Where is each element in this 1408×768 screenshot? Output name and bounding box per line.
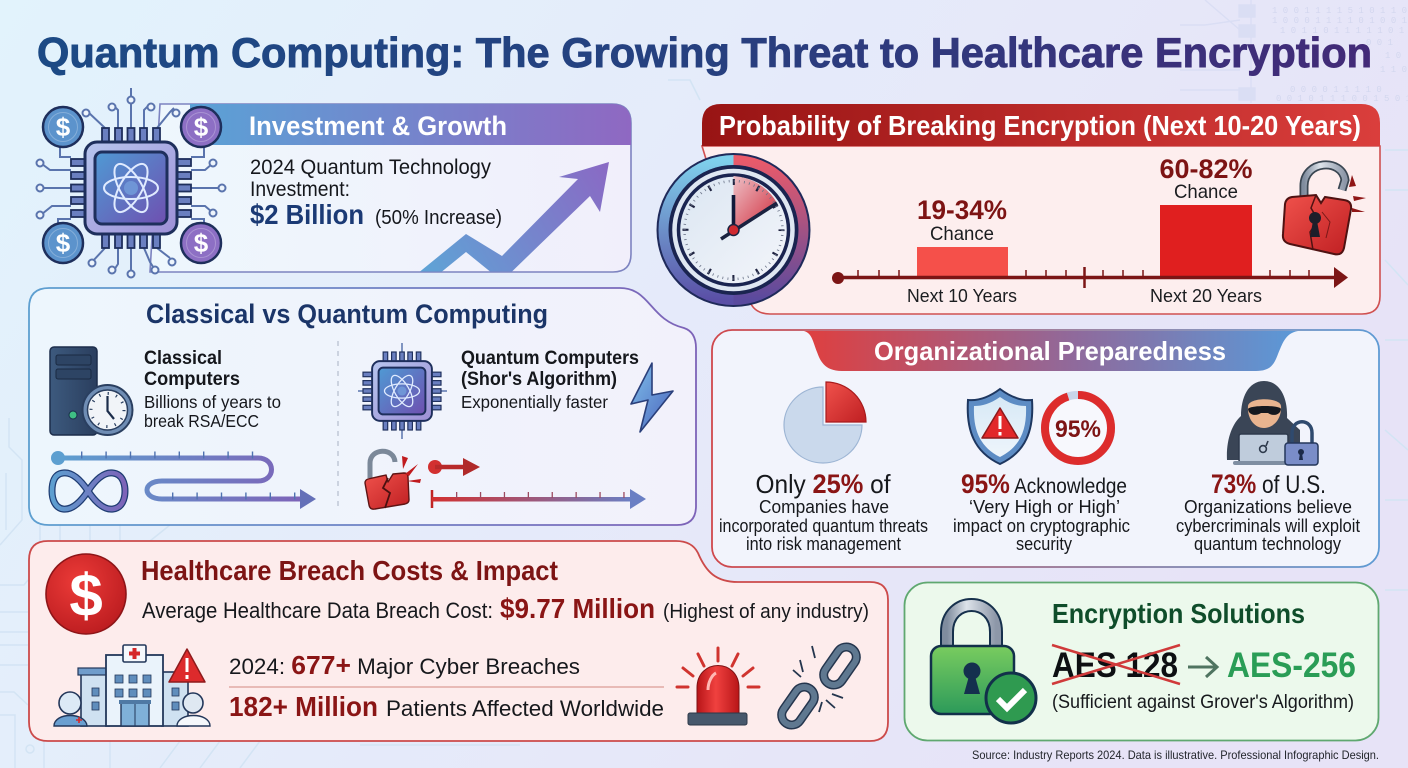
divider: [337, 341, 339, 510]
quantum text: (Shor's Algorithm): [461, 368, 617, 390]
icon: small quantum chip: [358, 343, 447, 439]
axis labels: Next 20 Years: [1150, 286, 1262, 306]
label: 60-82%: [1160, 154, 1252, 203]
label: 19-34%: 19-34%: [917, 195, 1007, 225]
investment text: [250, 155, 502, 230]
stat: 95% acknowledge: impact on cryptographic: [953, 515, 1130, 536]
icon: quantum chip with coins: $: [56, 228, 71, 258]
stat: 73% of U.S. organizations: 73% of U.S.: [1211, 469, 1326, 499]
icon: 95% ring: [1045, 395, 1111, 461]
panel header: Organizational Preparedness: [874, 336, 1226, 366]
background: 0 0 1: [1366, 38, 1393, 48]
breach statistics: Patients Affected Worldwide: [386, 696, 664, 721]
average cost line: Average Healthcare Data Breach Cost:: [142, 598, 493, 623]
timeline axis: [832, 267, 1348, 288]
source note: Source: Industry Reports 2024. Data is illustrative. Professional Infographic Design.: [972, 748, 1379, 762]
average cost line: $9.77 Million: [500, 593, 655, 624]
stat: 25% of companies: Only 25% of: [756, 469, 891, 499]
AES note: (Sufficient against Grover's Algorithm): [1052, 692, 1354, 713]
panel heading: Encryption Solutions: [1052, 598, 1305, 629]
icon: pie chart 25%: [784, 382, 866, 463]
panel background: [29, 288, 696, 525]
classical text: [144, 347, 281, 431]
AES upgrade: AES-256: [1227, 646, 1356, 685]
icon: dollar circle: [46, 554, 126, 634]
background: 0 0 1 0 1 1 1 0 0 1 5 0 1: [1276, 94, 1408, 104]
investment text: Investment:: [250, 177, 350, 201]
chart: probability bars: [832, 154, 1348, 306]
panel: classical vs quantum computing: [29, 288, 696, 525]
quantum text: [461, 347, 639, 412]
panel heading: Classical vs Quantum Computing: [146, 299, 548, 329]
panel header: Investment & Growth: [249, 111, 507, 141]
panel: encryption solutions: [904, 582, 1378, 740]
label: 60-82%: Chance: [1174, 181, 1238, 203]
icon: quantum chip with coins: [36, 88, 226, 278]
panel background: [702, 146, 1380, 314]
stat: 73% of U.S. organizations: quantum technology: [1194, 533, 1342, 554]
background: 1 1 0: [1380, 65, 1407, 75]
average cost line: [142, 593, 869, 624]
stat: 73% of U.S. organizations: [1176, 469, 1360, 554]
panel heading: Healthcare Breach Costs & Impact: [141, 555, 558, 586]
icon: quantum chip with coins: $: [194, 228, 209, 258]
stat: 25% of companies: into risk management: [746, 533, 901, 554]
panel background: [904, 582, 1378, 740]
panel background: [712, 330, 1379, 567]
breach statistics: 2024: 677+ Major Cyber Breaches: [229, 650, 580, 680]
panel header: [702, 104, 1380, 146]
bar: next 20 years: [1160, 205, 1252, 277]
axis labels: Next 10 Years: [907, 286, 1017, 306]
quantum text: Exponentially faster: [461, 392, 608, 412]
breach statistics: 182+ Million: [229, 691, 378, 722]
icon: dollar circle: $: [69, 562, 103, 629]
classical text: Billions of years to: [144, 392, 281, 412]
stat: 25% of companies: incorporated quantum threats: [719, 515, 928, 536]
stat: 95% acknowledge: security: [1016, 533, 1073, 554]
panel header: [804, 331, 1298, 371]
icon: hacker with laptop and lock: [1227, 381, 1318, 465]
investment text: 2024 Quantum Technology: [250, 155, 491, 179]
panel: organizational preparedness: [712, 330, 1379, 567]
stat: 73% of U.S. organizations: cybercriminals will exploit: [1176, 515, 1360, 536]
quantum timeline: [428, 458, 646, 509]
icon: clock: [656, 153, 810, 307]
icon: 95% ring: 95%: [1055, 416, 1101, 443]
icon: quantum chip with coins: $: [194, 112, 209, 142]
investment text: $2 Billion: [250, 199, 364, 230]
label: 19-34%: Chance: [930, 223, 994, 245]
icon: broken chain: [778, 643, 860, 729]
panel: healthcare breach costs and impact: [29, 541, 888, 741]
title: Quantum Computing: The Growing Threat to Healthcare Encryption: [37, 29, 1372, 76]
label: 19-34%: [917, 195, 1007, 245]
classical text: break RSA/ECC: [144, 411, 259, 431]
panel: probability of breaking encryption: [656, 104, 1380, 314]
icon: broken padlock: [1283, 165, 1366, 254]
panel header: Probability of Breaking Encryption (Next 10-20 Years): [719, 110, 1361, 141]
stat: 73% of U.S. organizations: Organizations believe: [1184, 496, 1352, 517]
panel: investment and growth: [36, 88, 631, 278]
classical timeline: [51, 451, 316, 509]
icon: broken lock: [365, 451, 421, 509]
panel background: [150, 104, 631, 272]
infinity color: [52, 473, 125, 509]
stat: 25% of companies: Companies have: [759, 496, 889, 517]
investment text: (50% Increase): [375, 206, 502, 229]
classical text: Classical: [144, 347, 222, 369]
growth arrow: [420, 162, 609, 272]
icon: warning shield: [968, 389, 1032, 464]
label: 60-82%: 60-82%: [1160, 154, 1252, 184]
icon: quantum chip with coins: $: [56, 112, 71, 142]
icon: hospital with warning and staff: [54, 645, 210, 726]
icon: infinity: [52, 473, 125, 509]
AES upgrade: AES 128: [1052, 646, 1178, 685]
icon: server with clock: [50, 347, 132, 435]
background: 1 0: [1385, 51, 1401, 61]
quantum text: Quantum Computers: [461, 347, 639, 369]
classical text: Computers: [144, 368, 240, 390]
stat: 95% acknowledge: ‘Very High or High’: [969, 496, 1120, 517]
panel header: [190, 104, 631, 145]
axis labels: [907, 286, 1262, 306]
icon: green padlock with check: [931, 605, 1036, 723]
stat: 95% acknowledge: [953, 469, 1130, 554]
icon: lightning bolt: [631, 363, 673, 432]
breach statistics: [229, 650, 664, 722]
icon: red siren: [677, 648, 759, 725]
background: 0 0 0 0 1 1 1 1 0: [1290, 85, 1382, 95]
AES upgrade: [1052, 645, 1356, 685]
stat: 25% of companies: [719, 469, 928, 554]
panel background: [29, 541, 888, 741]
stat: 95% acknowledge: 95% Acknowledge: [961, 469, 1127, 499]
average cost line: (Highest of any industry): [663, 601, 869, 623]
bar: next 10 years: [917, 247, 1008, 277]
